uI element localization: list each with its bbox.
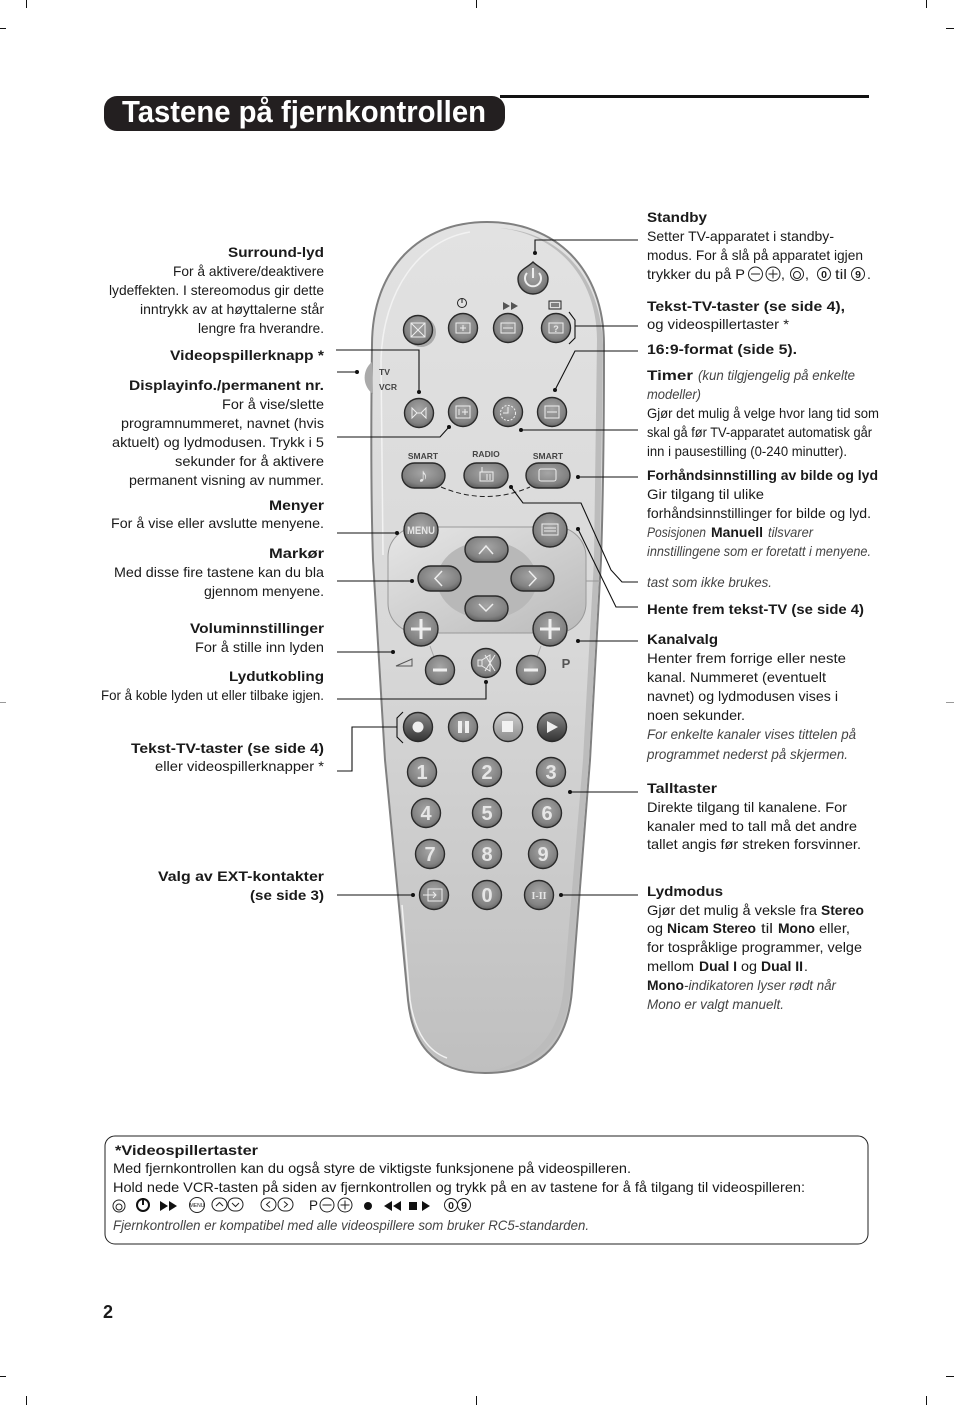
left text: Markør: gjennom menyene.: [204, 583, 324, 599]
left text: Menyer: For å vise eller avslutte menyene.: [111, 515, 324, 531]
left text: Surround-lyd: inntrykk av at høyttalerne står: [140, 301, 324, 317]
left text: Markør: Med disse fire tastene kan du bla: [114, 564, 324, 580]
number keys: 7: [424, 844, 436, 866]
right text: Standby: Setter TV-apparatet i standby-: [647, 228, 834, 244]
note key icons: P: [309, 1197, 318, 1213]
right text: Lydmodus: til: [761, 920, 773, 936]
side switch TV/VCR: TV: [379, 368, 391, 377]
right text: Forhåndsinnstilling: [647, 467, 878, 559]
number keys: [408, 758, 566, 910]
right text: Standby: [647, 209, 871, 282]
number keys: 6: [541, 803, 553, 825]
volume and programme keys: [396, 612, 571, 684]
left text: Displayinfo: permanent visning av nummer.: [129, 472, 324, 488]
left text: Menyer: Menyer: [269, 497, 325, 513]
note body: [113, 1160, 805, 1195]
standby button: [518, 262, 548, 294]
note key icons: MENU: [190, 1203, 205, 1209]
right text: Lydmodus: Mono: [647, 978, 684, 993]
title: [104, 94, 869, 131]
left text: Surround-lyd: lengre fra hverandre.: [198, 320, 324, 336]
right text: Forhåndsinnstilling: Manuell: [711, 525, 763, 540]
note body: Hold nede VCR-tasten på siden av fjernkontrollen og trykk på en av tastene for å få tilgang til videospilleren:: [113, 1179, 805, 1195]
transport keys: [404, 712, 566, 742]
right text: Lydmodus: og: [647, 920, 663, 936]
left text: Menyer: [111, 497, 325, 531]
right text: Forhåndsinnstilling: innstillingene som er foretatt i menyene.: [647, 543, 871, 559]
right text: Kanalvalg: programmet nederst på skjermen.: [646, 746, 848, 762]
right text: Standby: Standby: [647, 209, 707, 225]
right text: Talltaster: Direkte tilgang til kanalene. For: [647, 799, 847, 815]
right text: Lydmodus: Gjør det mulig å veksle fra: [647, 902, 817, 918]
right text: Tekst-TV-taster: [647, 298, 845, 332]
note compatibility line: Fjernkontrollen er kompatibel med alle videospillere som bruker RC5-standarden.: [113, 1217, 589, 1233]
left text: Lydutkobling: Lydutkobling: [229, 668, 324, 684]
left text: Lydutkobling: For å koble lyden ut eller tilbake igjen.: [101, 687, 324, 703]
left text: Surround-lyd: [109, 244, 324, 336]
right text: Kanalvalg: [646, 631, 856, 762]
menu and teletext buttons: [404, 513, 567, 547]
right text: Lydmodus: for tospråklige programmer, velge: [647, 939, 862, 955]
right text: Standby: modus. For å slå på apparatet igjen: [647, 247, 863, 263]
right text: unused key note: tast som ikke brukes.: [647, 574, 772, 590]
left text: Voluminnstillinger: For å stille inn lyden: [195, 639, 324, 655]
left text: Displayinfo: programnummeret, navnet (hvis: [121, 415, 324, 431]
number keys: 9: [537, 844, 549, 866]
right text: Standby: 0: [821, 269, 827, 281]
right text: Tekst-TV-taster: Tekst-TV-taster (se side 4),: [647, 298, 845, 314]
left text: Valg av EXT-kontakter: Valg av EXT-kontakter: [158, 868, 325, 884]
right text: Lydmodus: Lydmodus: [647, 883, 723, 899]
left text: Valg av EXT-kontakter: (se side 3): [250, 887, 324, 903]
number keys: 0: [481, 885, 493, 907]
right text: Lydmodus: Stereo: [821, 903, 864, 918]
note key icons: 9: [461, 1200, 467, 1212]
right text: Standby: .: [867, 266, 871, 282]
right text: Forhåndsinnstilling: tilsvarer: [768, 524, 814, 540]
left text: Lydutkobling: [101, 668, 324, 703]
side switch TV/VCR: [365, 362, 397, 394]
right text: Hente frem tekst-TV: Hente frem tekst-TV (se side 4): [647, 601, 864, 617]
right text: Lydmodus: Mono er valgt manuelt.: [647, 996, 784, 1012]
left text: Videopspillerknapp: Videopspillerknapp *: [170, 347, 325, 363]
note key icons: 0: [448, 1200, 454, 1212]
left text: Surround-lyd: Surround-lyd: [228, 244, 324, 260]
right text: Lydmodus: mellom: [647, 958, 694, 974]
right text: Lydmodus: Nicam Stereo: [667, 921, 756, 936]
right text: Kanalvalg: navnet) og lydmodusen vises i: [647, 688, 838, 704]
left text: Surround-lyd: lydeffekten. I stereomodus gir dette: [109, 282, 324, 298]
right text: Talltaster: Talltaster: [647, 780, 718, 796]
right text: Kanalvalg: noen sekunder.: [647, 707, 745, 723]
right text: Lydmodus: Mono: [778, 921, 815, 936]
left text: Displayinfo: sekunder for å aktivere: [175, 453, 324, 469]
left text: Tekst-TV-taster: Tekst-TV-taster (se side 4): [131, 740, 324, 756]
left text: Markør: [114, 545, 325, 599]
right text: Timer: Gjør det mulig å velge hvor lang tid som: [647, 405, 879, 421]
right text: Standby: til: [835, 266, 847, 282]
right text: Lydmodus: og: [741, 958, 757, 974]
left text: Displayinfo: For å vise/slette: [222, 396, 324, 412]
right text: Lydmodus: Dual II: [761, 959, 803, 974]
right text: Standby: ,: [781, 266, 785, 282]
right text: Lydmodus: -indikatoren lyser rødt når: [684, 977, 837, 993]
right text: Kanalvalg: kanal. Nummeret (eventuelt: [647, 669, 826, 685]
left text: Markør: Markør: [269, 545, 325, 561]
right text: Talltaster: [647, 780, 861, 852]
function icons row: [458, 298, 561, 310]
number keys: 3: [545, 762, 557, 784]
right text: Timer: inn i pausestilling (0-240 minutter).: [647, 443, 847, 459]
right text: Kanalvalg: For enkelte kanaler vises tittelen på: [647, 726, 856, 742]
smart and radio buttons: SMART: [408, 451, 439, 461]
right text: Kanalvalg: Henter frem forrige eller neste: [647, 650, 846, 666]
page number: 2: [103, 1302, 113, 1322]
left text: Displayinfo: [112, 377, 324, 488]
number keys: 2: [481, 762, 493, 784]
note heading: *Videospillertaster: [115, 1142, 259, 1158]
right text: Standby: ,: [805, 266, 809, 282]
side switch TV/VCR: VCR: [379, 383, 397, 392]
right text: Timer: skal gå før TV-apparatet automatisk går: [647, 424, 872, 440]
note body: Med fjernkontrollen kan du også styre de viktigste funksjonene på videospilleren.: [113, 1160, 631, 1176]
smart and radio buttons: RADIO: [472, 449, 500, 459]
menu and teletext buttons: MENU: [407, 525, 435, 537]
number keys: 1: [416, 762, 428, 784]
left text: Voluminnstillinger: Voluminnstillinger: [190, 620, 325, 636]
right text: Forhåndsinnstilling: forhåndsinnstillinger for bilde og lyd.: [647, 505, 871, 521]
note key icons: [113, 1197, 470, 1213]
left text: Voluminnstillinger: [190, 620, 325, 655]
right text: Timer: modeller): [647, 386, 701, 402]
right text: Timer: Timer: [647, 367, 694, 383]
volume and programme keys: P: [562, 656, 571, 671]
left text: Valg av EXT-kontakter: [158, 868, 325, 903]
button row 2: [404, 398, 566, 428]
left text: Displayinfo: aktuelt) og lydmodusen. Trykk i 5: [112, 434, 324, 450]
title: Tastene på fjernkontrollen: [122, 94, 486, 129]
right text: Kanalvalg: Kanalvalg: [647, 631, 718, 647]
right text: Talltaster: tallet angis før streken forsvinner.: [647, 836, 861, 852]
smart and radio buttons: SMART: [533, 451, 564, 461]
right text: Forhåndsinnstilling: Forhåndsinnstilling av bilde og lyd: [647, 467, 878, 483]
number keys: I-II: [531, 891, 547, 902]
left text: Tekst-TV-taster: [131, 740, 325, 774]
right text: Standby: trykker du på P: [647, 266, 745, 282]
number keys: 5: [481, 803, 493, 825]
right text: Tekst-TV-taster: og videospillertaster *: [647, 316, 790, 332]
smart and radio buttons: ♪: [418, 465, 428, 487]
right text: Timer: [647, 367, 879, 459]
right text: Lydmodus: eller,: [819, 920, 850, 936]
right text: Lydmodus: Dual I: [699, 959, 737, 974]
right text: Forhåndsinnstilling: Gir tilgang til ulike: [647, 486, 764, 502]
left text: Tekst-TV-taster: eller videospillerknapper *: [155, 758, 325, 774]
right text: Timer: (kun tilgjengelig på enkelte: [698, 367, 855, 383]
left text: Displayinfo: Displayinfo./permanent nr.: [129, 377, 324, 393]
right text: Standby: 9: [855, 269, 861, 281]
cursor keys: [418, 537, 554, 621]
smart and radio buttons: [402, 449, 570, 496]
right text: Lydmodus: [647, 883, 864, 1012]
right text: Forhåndsinnstilling: Posisjonen: [647, 524, 706, 540]
right text: Talltaster: kanaler med to tall må det andre: [647, 818, 857, 834]
leader lines: [336, 240, 638, 897]
right text: Lydmodus: .: [804, 958, 808, 974]
left text: Surround-lyd: For å aktivere/deaktivere: [173, 263, 324, 279]
button row 1: ?: [553, 324, 559, 334]
remote control: [365, 222, 604, 1073]
navigation pad: [388, 527, 600, 633]
number keys: 8: [481, 844, 493, 866]
remote body: [371, 222, 604, 1073]
panel: video player keys note: [105, 1136, 868, 1244]
button row 1: [404, 314, 570, 347]
right text: 16:9-format: 16:9-format (side 5).: [647, 341, 797, 357]
number keys: 4: [420, 803, 432, 825]
